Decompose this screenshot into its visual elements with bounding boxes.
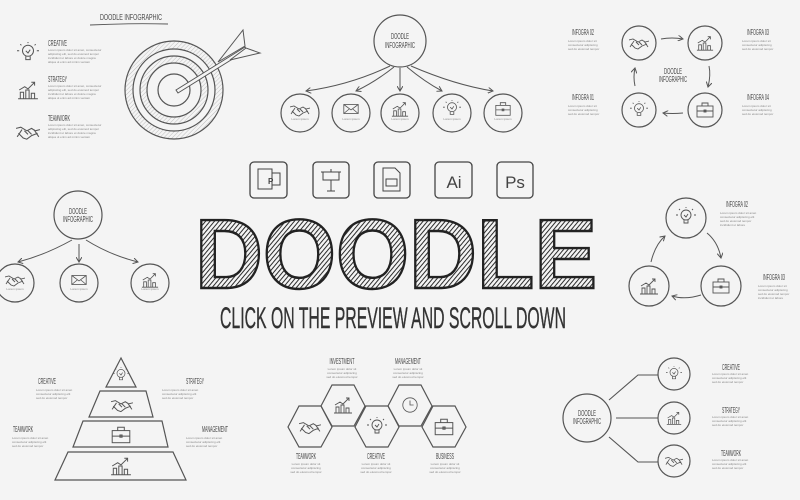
panel: middle-right cycle: incididunt ut labore bbox=[758, 296, 784, 300]
panel: pyramid: Lorem ipsum dolor sit amet bbox=[186, 436, 222, 440]
panel: pyramid: STRATEGY bbox=[186, 377, 204, 386]
panel: middle-right cycle bbox=[629, 198, 789, 306]
arrows bbox=[306, 66, 493, 91]
panel: hexagons: CREATIVE bbox=[367, 452, 385, 461]
text: MANAGEMENT bbox=[202, 425, 228, 434]
nodes: Lorem ipsum bbox=[391, 117, 409, 121]
nodes: Lorem ipsum bbox=[443, 117, 461, 121]
panel: top-right cycle: INFOGRA 03 bbox=[747, 28, 769, 37]
panel: pyramid bbox=[12, 358, 228, 480]
panel: hexagons: INVESTMENT bbox=[330, 357, 355, 366]
panel: middle-left tree: Lorem ipsum bbox=[6, 287, 24, 291]
item: creative bbox=[17, 39, 101, 64]
main circle bbox=[374, 15, 426, 67]
panel: pyramid: sed do eiusmod tempor bbox=[36, 396, 67, 400]
panel: bottom-right tree: consectetur adipiscing elit bbox=[712, 376, 747, 380]
nodes bbox=[281, 94, 522, 132]
panel: pyramid: Lorem ipsum dolor sit amet bbox=[162, 388, 198, 392]
item: teamwork: aliqua ut enim ad minim veniam bbox=[48, 135, 91, 139]
panel: middle-right cycle: incididunt ut labore bbox=[720, 223, 746, 227]
panel: top-right cycle: INFOGRAPHIC bbox=[659, 75, 687, 84]
panel: hexagons: MANAGEMENT bbox=[395, 357, 421, 366]
panel: pyramid: consectetur adipiscing elit bbox=[186, 440, 221, 444]
panel: top-right cycle: consectetur adipiscing bbox=[742, 43, 772, 47]
panel: bottom-right tree: sed do eiusmod tempor bbox=[712, 380, 743, 384]
panel: hexagons: sed do eiusmod tempor bbox=[290, 470, 322, 474]
panel: hexagons: TEAMWORK bbox=[296, 452, 316, 461]
panel: hexagons bbox=[288, 357, 466, 474]
panel: bottom-right tree: consectetur adipiscing elit bbox=[712, 462, 747, 466]
item: teamwork: incididunt ut labore et dolore magna bbox=[48, 131, 96, 135]
panel: hexagons: Lorem ipsum dolor sit bbox=[328, 367, 356, 371]
panel: hexagons: Lorem ipsum dolor sit bbox=[362, 462, 390, 466]
chart: target with arrow bbox=[125, 30, 260, 139]
panel: top-right cycle: sed do eiusmod tempor bbox=[568, 47, 599, 51]
item: creative: CREATIVE bbox=[48, 39, 67, 48]
item: teamwork: Lorem ipsum dolor sit amet, consectetur bbox=[48, 123, 101, 127]
panel: middle-right cycle: consectetur adipiscing bbox=[758, 288, 788, 292]
panel: middle-left tree bbox=[0, 191, 169, 302]
panel: pyramid: Lorem ipsum dolor sit amet bbox=[36, 388, 72, 392]
panel: middle-left tree: Lorem ipsum bbox=[70, 287, 88, 291]
panel: middle-right cycle: consectetur adipiscing elit bbox=[720, 215, 755, 219]
item: creative: Lorem ipsum dolor sit amet, consectetur bbox=[48, 48, 101, 52]
panel: top-right cycle: Lorem ipsum dolor sit bbox=[568, 39, 597, 43]
item: strategy: STRATEGY bbox=[48, 75, 67, 84]
panel: top-right cycle: sed do eiusmod tempor bbox=[742, 112, 773, 116]
panel: bottom-right tree: consectetur adipiscing elit bbox=[712, 419, 747, 423]
panel: bottom-right tree bbox=[563, 358, 748, 477]
panel: top-right cycle: consectetur adipiscing bbox=[568, 108, 598, 112]
panel: pyramid: sed do eiusmod tempor bbox=[186, 444, 217, 448]
panel: bottom-right tree: INFOGRAPHIC bbox=[573, 417, 601, 426]
panel: bottom-right tree: sed do eiusmod tempor bbox=[712, 423, 743, 427]
panel: top-right cycle: INFOGRA 01 bbox=[572, 93, 594, 102]
panel: hexagons: sed do eiusmod tempor bbox=[360, 470, 392, 474]
nodes: Lorem ipsum bbox=[494, 117, 512, 121]
item: creative: adipiscing elit, sed do eiusmod tempor bbox=[48, 52, 99, 56]
item: strategy: aliqua ut enim ad minim veniam bbox=[48, 96, 91, 100]
panel: top-right cycle: consectetur adipiscing bbox=[568, 43, 598, 47]
title: DOODLE: DOODLE bbox=[195, 199, 597, 309]
panel: middle-left tree: DOODLE bbox=[69, 207, 87, 216]
heading: doodle infographic bbox=[90, 13, 168, 25]
panel: middle-right cycle: Lorem ipsum dolor sit bbox=[758, 284, 787, 288]
panel: top-right cycle: Lorem ipsum dolor sit bbox=[742, 39, 771, 43]
panel: top-right cycle: DOODLE bbox=[664, 67, 682, 76]
panel: middle-left tree: INFOGRAPHIC bbox=[63, 215, 93, 224]
panel: top-right cycle: Lorem ipsum dolor sit bbox=[742, 104, 771, 108]
panel: hexagons: sed do eiusmod tempor bbox=[429, 470, 461, 474]
panel: hexagons: BUSINESS bbox=[436, 452, 454, 461]
panel: top-center tree bbox=[281, 15, 522, 132]
item: teamwork: TEAMWORK bbox=[48, 114, 70, 123]
panel: bottom-right tree: sed do eiusmod tempor bbox=[712, 466, 743, 470]
main circle: INFOGRAPHIC bbox=[385, 41, 415, 50]
panel: bottom-right tree: DOODLE bbox=[578, 409, 596, 418]
item: strategy bbox=[18, 75, 101, 100]
icons: software row bbox=[250, 162, 533, 198]
panel: top-right cycle bbox=[568, 26, 773, 127]
item: teamwork: adipiscing elit, sed do eiusmod tempor bbox=[48, 127, 99, 131]
panel: hexagons: consectetur adipiscing bbox=[327, 371, 357, 375]
item: creative: incididunt ut labore et dolore magna bbox=[48, 56, 96, 60]
panel: pyramid: TEAMWORK bbox=[13, 425, 33, 434]
panel: hexagons: Lorem ipsum dolor sit bbox=[431, 462, 460, 466]
panel: hexagons: consectetur adipiscing bbox=[393, 371, 423, 375]
text: P bbox=[268, 177, 274, 186]
item: strategy: adipiscing elit, sed do eiusmod tempor bbox=[48, 88, 99, 92]
panel: hexagons: Lorem ipsum dolor sit bbox=[394, 367, 422, 371]
nodes: Lorem ipsum bbox=[291, 117, 309, 121]
panel: pyramid: Lorem ipsum dolor sit amet bbox=[12, 436, 48, 440]
panel: bottom-right tree: Lorem ipsum dolor sit amet bbox=[712, 415, 748, 419]
panel: hexagons: sed do eiusmod tempor bbox=[392, 375, 424, 379]
panel: top-right cycle: sed do eiusmod tempor bbox=[568, 112, 599, 116]
panel: bottom-right tree: STRATEGY bbox=[722, 406, 740, 415]
panel: top-right cycle: INFOGRA 02 bbox=[572, 28, 594, 37]
panel: bottom-right tree: Lorem ipsum dolor sit amet bbox=[712, 458, 748, 462]
panel: top-right cycle: Lorem ipsum dolor sit bbox=[568, 104, 597, 108]
panel: pyramid: consectetur adipiscing elit bbox=[12, 440, 47, 444]
nodes: Lorem ipsum bbox=[342, 117, 360, 121]
item: strategy: incididunt ut labore et dolore magna bbox=[48, 92, 96, 96]
panel: middle-right cycle: INFOGRA 02 bbox=[726, 200, 748, 209]
panel: pyramid: sed do eiusmod tempor bbox=[12, 444, 43, 448]
panel: top-right cycle: INFOGRA 04 bbox=[747, 93, 769, 102]
panel: top-right cycle: sed do eiusmod tempor bbox=[742, 47, 773, 51]
panel: pyramid: consectetur adipiscing elit bbox=[162, 392, 197, 396]
panel: middle-right cycle: sed do eiusmod tempor bbox=[758, 292, 789, 296]
panel: hexagons: sed do eiusmod tempor bbox=[326, 375, 358, 379]
panel: pyramid: consectetur adipiscing elit bbox=[36, 392, 71, 396]
item: teamwork bbox=[16, 114, 101, 139]
panel: hexagons: Lorem ipsum dolor sit bbox=[292, 462, 320, 466]
panel: hexagons: consectetur adipiscing bbox=[361, 466, 391, 470]
panel: middle-right cycle: sed do eiusmod tempor bbox=[720, 219, 751, 223]
panel: pyramid: sed do eiusmod tempor bbox=[162, 396, 193, 400]
panel: hexagons: consectetur adipiscing bbox=[430, 466, 460, 470]
panel: pyramid: CREATIVE bbox=[38, 377, 56, 386]
panel: hexagons: consectetur adipiscing bbox=[291, 466, 321, 470]
panel: top-right cycle: consectetur adipiscing bbox=[742, 108, 772, 112]
item: creative: aliqua ut enim ad minim veniam bbox=[48, 60, 91, 64]
panel: middle-left tree: Lorem ipsum bbox=[141, 287, 159, 291]
text: Ps bbox=[505, 173, 525, 192]
panel: top-left target list bbox=[16, 13, 260, 139]
text: Ai bbox=[446, 173, 462, 192]
panel: bottom-right tree: TEAMWORK bbox=[721, 449, 741, 458]
item: strategy: Lorem ipsum dolor sit amet, consectetur bbox=[48, 84, 101, 88]
main circle: DOODLE bbox=[391, 32, 409, 41]
panel: middle-right cycle: Lorem ipsum dolor sit amet bbox=[720, 211, 756, 215]
panel: bottom-right tree: CREATIVE bbox=[722, 363, 740, 372]
heading: doodle infographic: DOODLE INFOGRAPHIC bbox=[100, 13, 162, 22]
panel: bottom-right tree: Lorem ipsum dolor sit amet bbox=[712, 372, 748, 376]
